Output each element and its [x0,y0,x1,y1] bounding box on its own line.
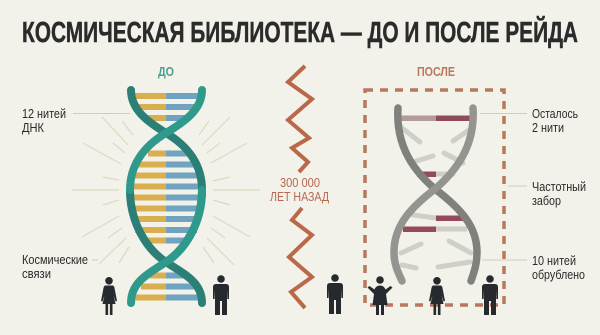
sunburst: cosmic connections rays [72,117,260,265]
light strand [130,90,202,190]
label: 10 strands cut [482,254,585,282]
red rungs [403,172,465,232]
yellow rung halves [130,93,166,300]
person: man centre [327,274,343,314]
top rung [398,116,436,121]
label: 12 strands: ДНК [22,121,45,135]
DNA before: 12 strands [130,90,202,303]
person: woman left [101,277,117,315]
label: 10 strands cut: обрублено [532,268,585,282]
person: man left [213,275,229,315]
label: cosmic connections: связи [22,267,51,281]
heading: after: ПОСЛЕ [417,65,455,79]
person: man right [482,275,498,315]
dark strand [131,90,202,262]
label: frequency fence: Частотный [532,180,586,194]
label: 12 strands [22,107,130,135]
DNA after: 2 strands remain [394,108,477,281]
label: frequency fence [508,180,586,208]
person: woman centre [429,277,445,315]
broken rung fragments [401,128,472,268]
zigzag divider: top [288,66,312,172]
label: 10 strands cut: 10 нитей [532,254,576,268]
zigzag divider: bottom [289,208,312,308]
label: 2 strands remain: Осталось [532,107,578,121]
time label: 300 000 [280,175,320,190]
label: cosmic connections: Космические [22,253,88,267]
label: frequency fence: забор [532,194,561,208]
heading: before: ДО [158,65,174,79]
label: 2 strands remain: 2 нити [532,121,564,135]
gray strands [398,108,477,281]
label: 2 strands remain [480,107,578,135]
label: cosmic connections [22,253,98,281]
label: 12 strands: 12 нитей [22,107,66,121]
frequency fence dashed box [365,90,504,305]
person: woman with raised arms [368,276,392,315]
time label: ЛЕТ НАЗАД [270,189,329,204]
blue rung halves [166,93,202,300]
time label [270,175,329,204]
